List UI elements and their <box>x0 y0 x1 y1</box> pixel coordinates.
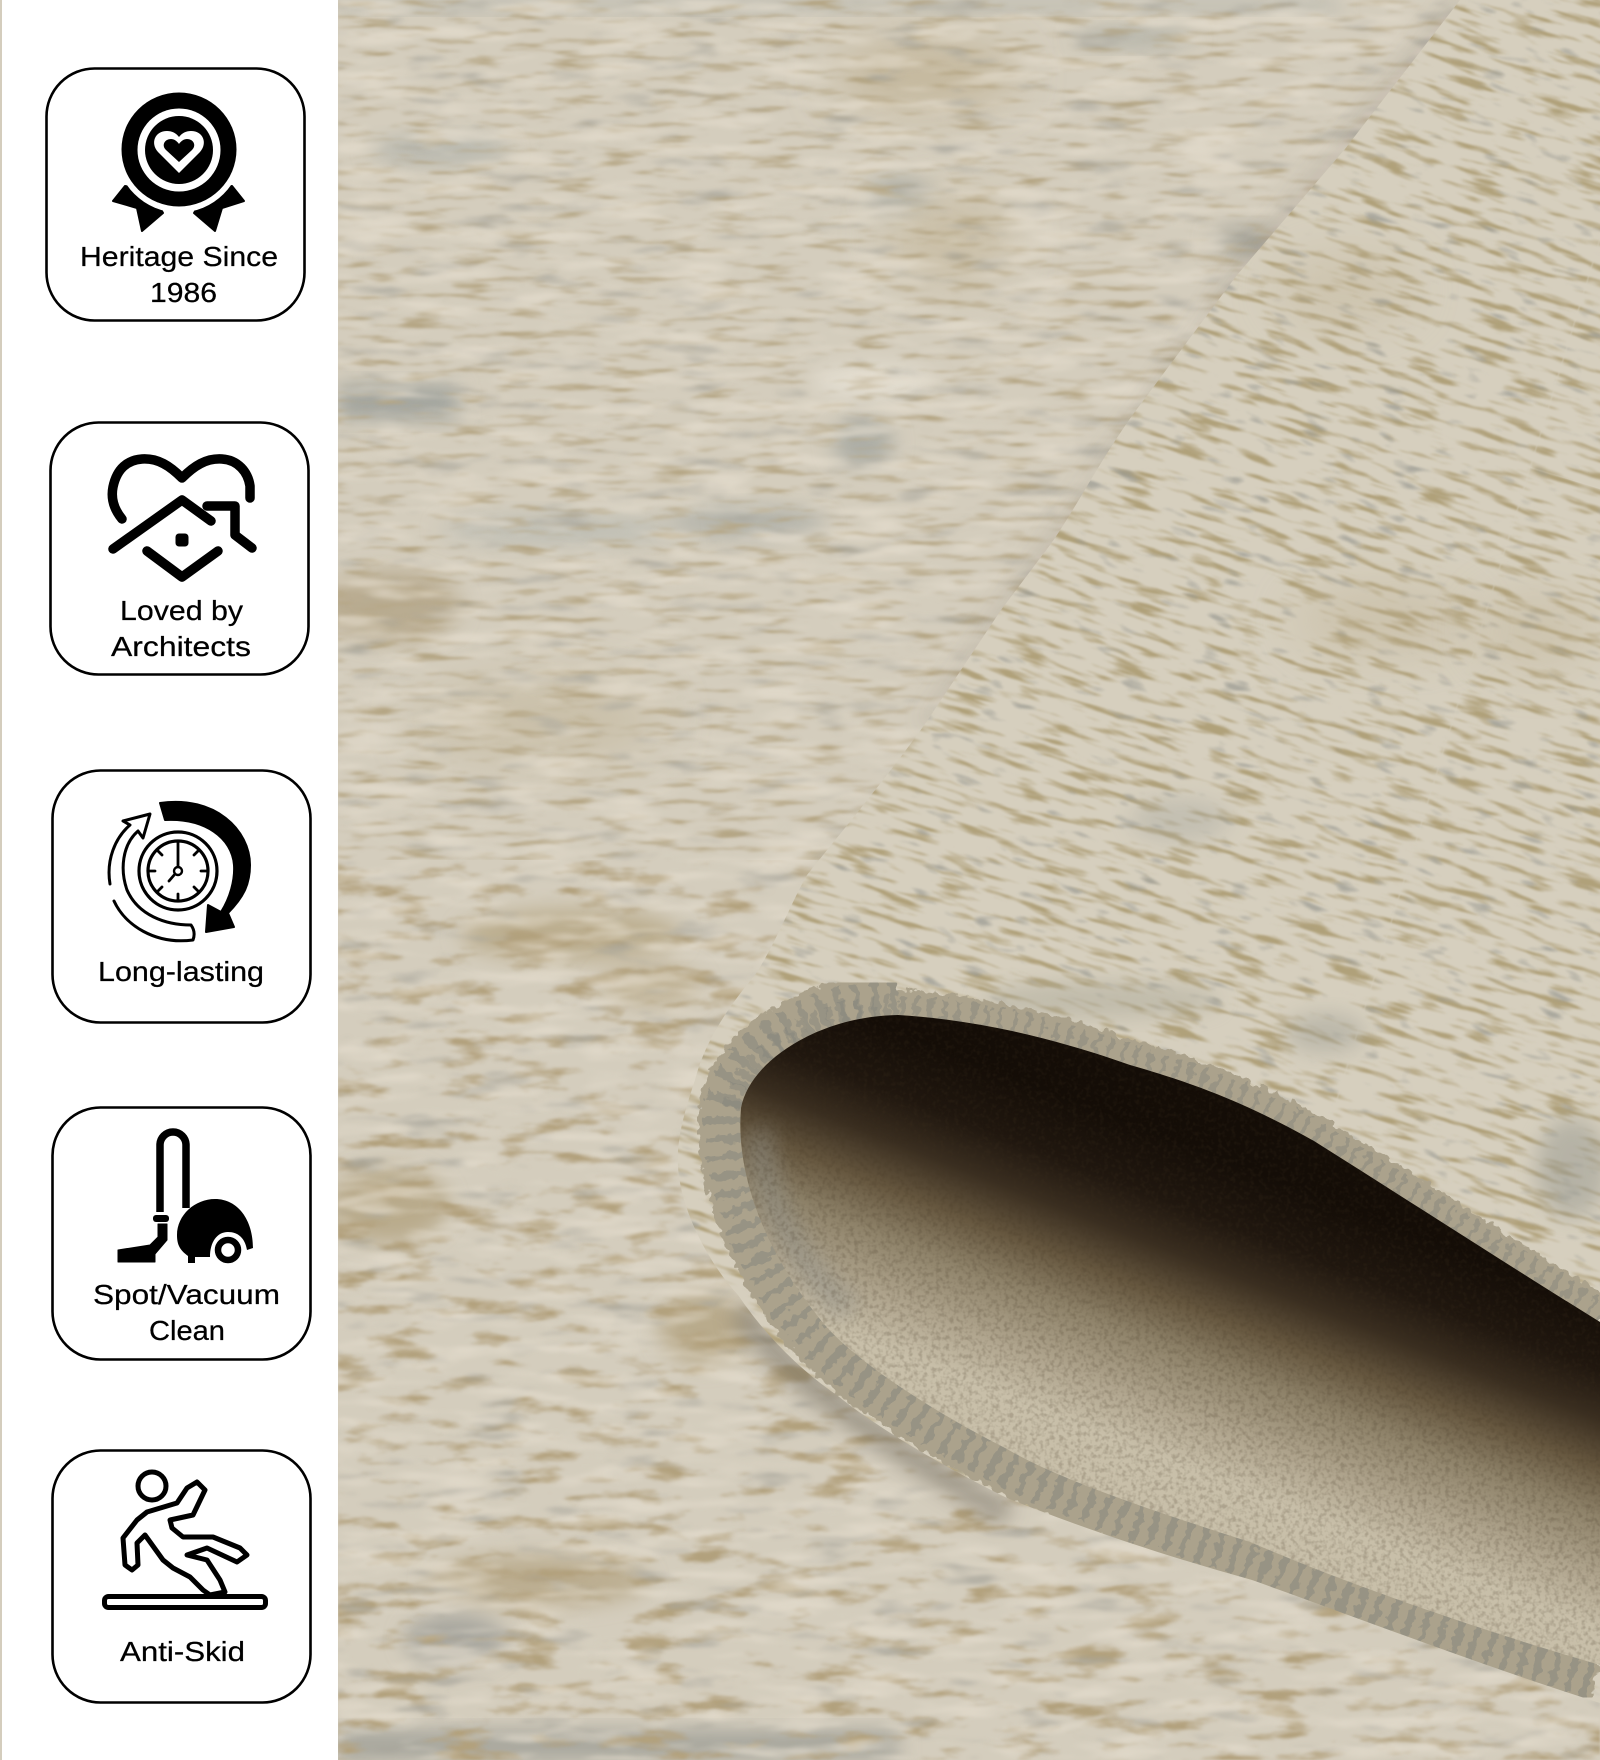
label: heritage since 1986: 1986 <box>150 277 217 308</box>
rug rim binding <box>740 1015 1600 1665</box>
icon: vacuum cleaner <box>118 1132 253 1263</box>
badge: loved by architects <box>50 422 308 674</box>
icon: medal with heart <box>113 86 244 231</box>
icon: slipping figure <box>104 1472 266 1608</box>
label: spot/vacuum clean: Spot/Vacuum <box>93 1279 280 1310</box>
badge: heritage since 1986 <box>46 68 304 320</box>
icon: clock with circular arrows <box>109 802 250 941</box>
label: long-lasting: Long-lasting <box>98 956 264 987</box>
badge: long-lasting <box>52 770 310 1022</box>
label: loved by architects: Architects <box>111 631 251 662</box>
label: loved by architects <box>111 595 251 662</box>
badge: spot/vacuum clean <box>52 1108 310 1360</box>
label: heritage since 1986: Heritage Since <box>80 241 278 272</box>
badge: anti-skid <box>52 1450 310 1702</box>
rolled rug edge <box>678 0 1600 1702</box>
label: anti-skid: Anti-Skid <box>120 1636 245 1667</box>
roll shadow on floor <box>740 0 1460 1515</box>
label: spot/vacuum clean: Clean <box>149 1315 225 1346</box>
label: loved by architects: Loved by <box>120 595 243 626</box>
icon: heart and house <box>112 459 252 577</box>
label: heritage since 1986 <box>80 241 278 308</box>
rug underside opening <box>740 1015 1600 1665</box>
label: spot/vacuum clean <box>93 1279 280 1346</box>
panel: feature sidebar <box>2 0 338 1760</box>
